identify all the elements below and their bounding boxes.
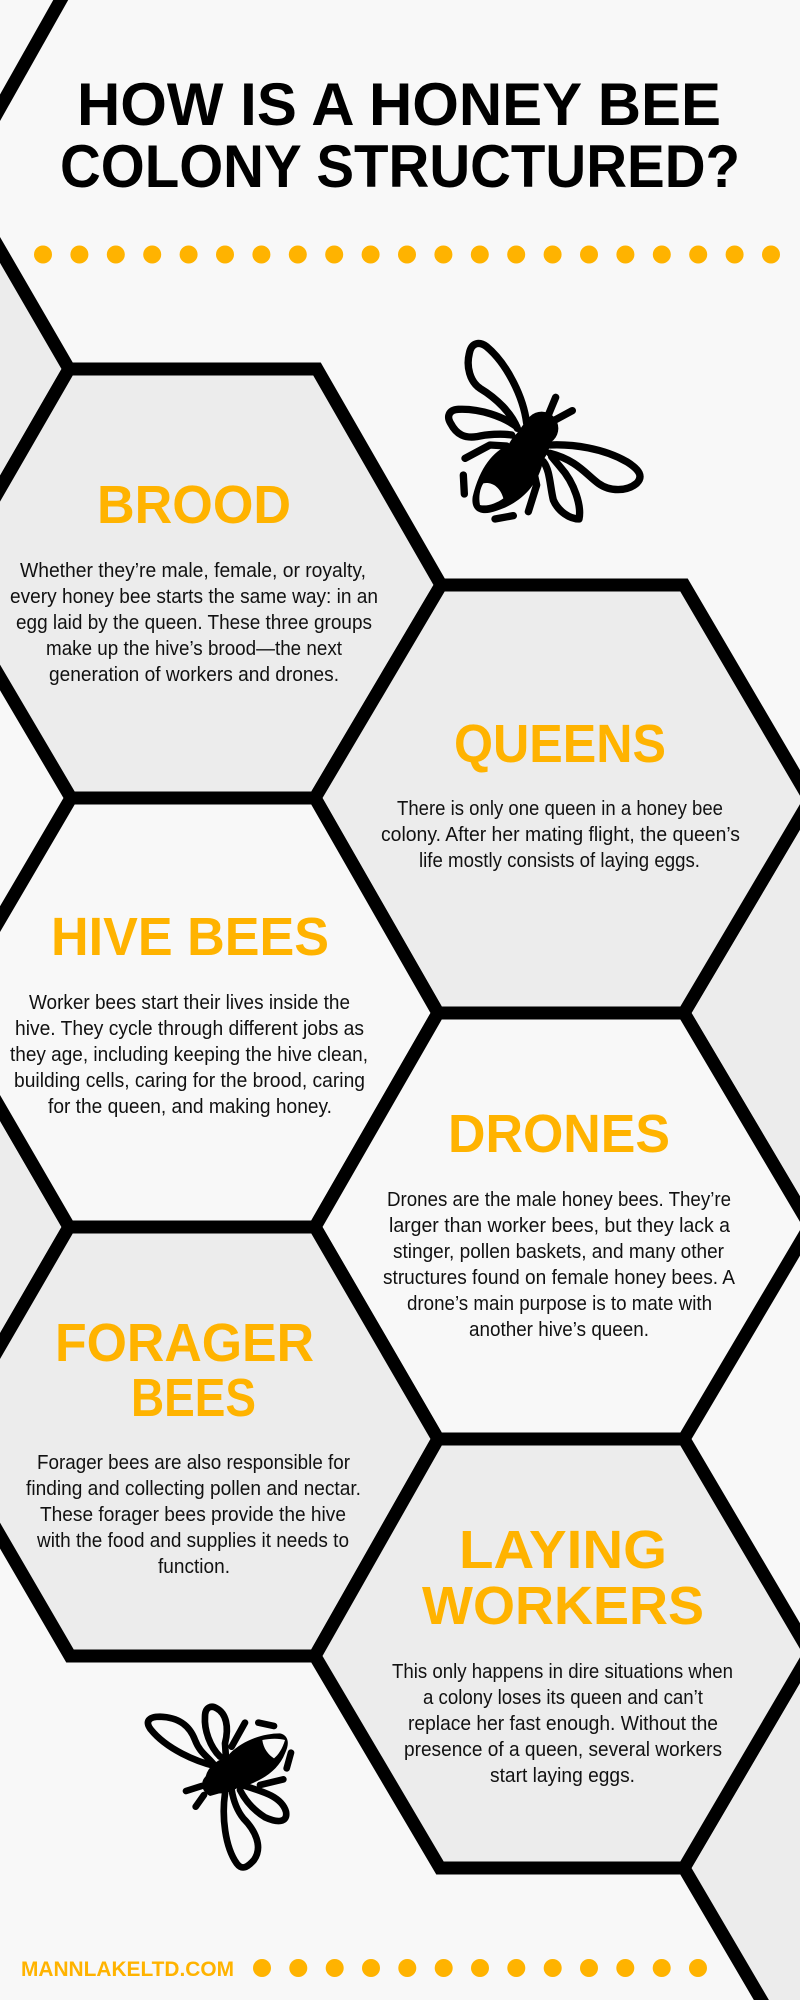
heading: forager bees: BEES xyxy=(131,1368,256,1428)
heading: laying workers: WORKERS xyxy=(422,1576,704,1636)
icon: bee bottom xyxy=(148,1707,291,1867)
text: brood: every honey bee starts the same way: in an xyxy=(10,586,378,608)
panel: drones xyxy=(315,1013,800,1439)
text: queens: There is only one queen in a honey bee xyxy=(397,798,723,820)
text: laying workers: presence of a queen, several workers xyxy=(404,1739,722,1761)
text: forager bees: Forager bees are also responsible for xyxy=(37,1452,350,1474)
text: drones: larger than worker bees, but they lack a xyxy=(389,1215,731,1237)
text: drones: structures found on female honey bees. A xyxy=(383,1267,736,1289)
heading: drones: DRONES xyxy=(448,1104,670,1164)
text: laying workers: replace her fast enough. Without the xyxy=(408,1713,718,1735)
text: forager bees xyxy=(26,1452,361,1578)
text: laying workers: start laying eggs. xyxy=(490,1765,635,1787)
text: queens: colony. After her mating flight, the queen’s xyxy=(381,824,740,846)
panel: forager bees xyxy=(0,1227,438,1656)
dotted divider xyxy=(34,246,780,264)
text: hive bees: hive. They cycle through different jobs as xyxy=(15,1018,364,1040)
text: forager bees: finding and collecting pollen and nectar. xyxy=(26,1478,361,1500)
text: laying workers: a colony loses its queen and can’t xyxy=(423,1687,703,1709)
panel: brood xyxy=(0,369,441,798)
text: brood: Whether they’re male, female, or royalty, xyxy=(20,560,366,582)
text: brood: egg laid by the queen. These three groups xyxy=(16,612,372,634)
text: brood xyxy=(10,560,378,686)
title: COLONY STRUCTURED? xyxy=(60,133,740,200)
icon: bee top xyxy=(449,343,640,519)
heading: queens: QUEENS xyxy=(454,714,666,774)
text: queens xyxy=(381,798,740,872)
text: drones: Drones are the male honey bees. They’re xyxy=(387,1189,731,1211)
panel: hive bees xyxy=(0,798,438,1227)
footer dots xyxy=(253,1959,707,1977)
heading: hive bees: HIVE BEES xyxy=(51,907,329,967)
title xyxy=(60,71,740,200)
heading: laying workers xyxy=(422,1520,704,1636)
text: forager bees: with the food and supplies it needs to xyxy=(36,1530,349,1552)
heading: brood: BROOD xyxy=(97,475,291,535)
text: forager bees: These forager bees provide the hive xyxy=(40,1504,346,1526)
heading: forager bees: FORAGER xyxy=(55,1313,314,1373)
text: laying workers xyxy=(392,1661,733,1787)
panel: laying workers xyxy=(315,1439,800,1868)
text: hive bees xyxy=(10,992,368,1118)
title: HOW IS A HONEY BEE xyxy=(77,71,721,138)
heading: laying workers: LAYING xyxy=(459,1520,667,1580)
text: queens: life mostly consists of laying eggs. xyxy=(419,850,700,872)
text: hive bees: they age, including keeping the hive clean, xyxy=(10,1044,368,1066)
text: drones: drone’s main purpose is to mate with xyxy=(407,1293,712,1315)
text: drones: another hive’s queen. xyxy=(469,1319,649,1341)
panel: queens xyxy=(315,585,800,1013)
text: hive bees: Worker bees start their lives inside the xyxy=(29,992,350,1014)
text: drones: stinger, pollen baskets, and many other xyxy=(393,1241,724,1263)
text: hive bees: for the queen, and making honey. xyxy=(48,1096,332,1118)
text: laying workers: This only happens in dire situations when xyxy=(392,1661,733,1683)
text: brood: generation of workers and drones. xyxy=(49,664,339,686)
text: forager bees: function. xyxy=(158,1556,230,1578)
text: brood: make up the hive’s brood—the next xyxy=(46,638,342,660)
text: hive bees: building cells, caring for the brood, caring xyxy=(14,1070,365,1092)
footer website: MANNLAKELTD.COM xyxy=(21,1958,234,1981)
text: drones xyxy=(383,1189,736,1341)
heading: forager bees xyxy=(55,1313,314,1428)
